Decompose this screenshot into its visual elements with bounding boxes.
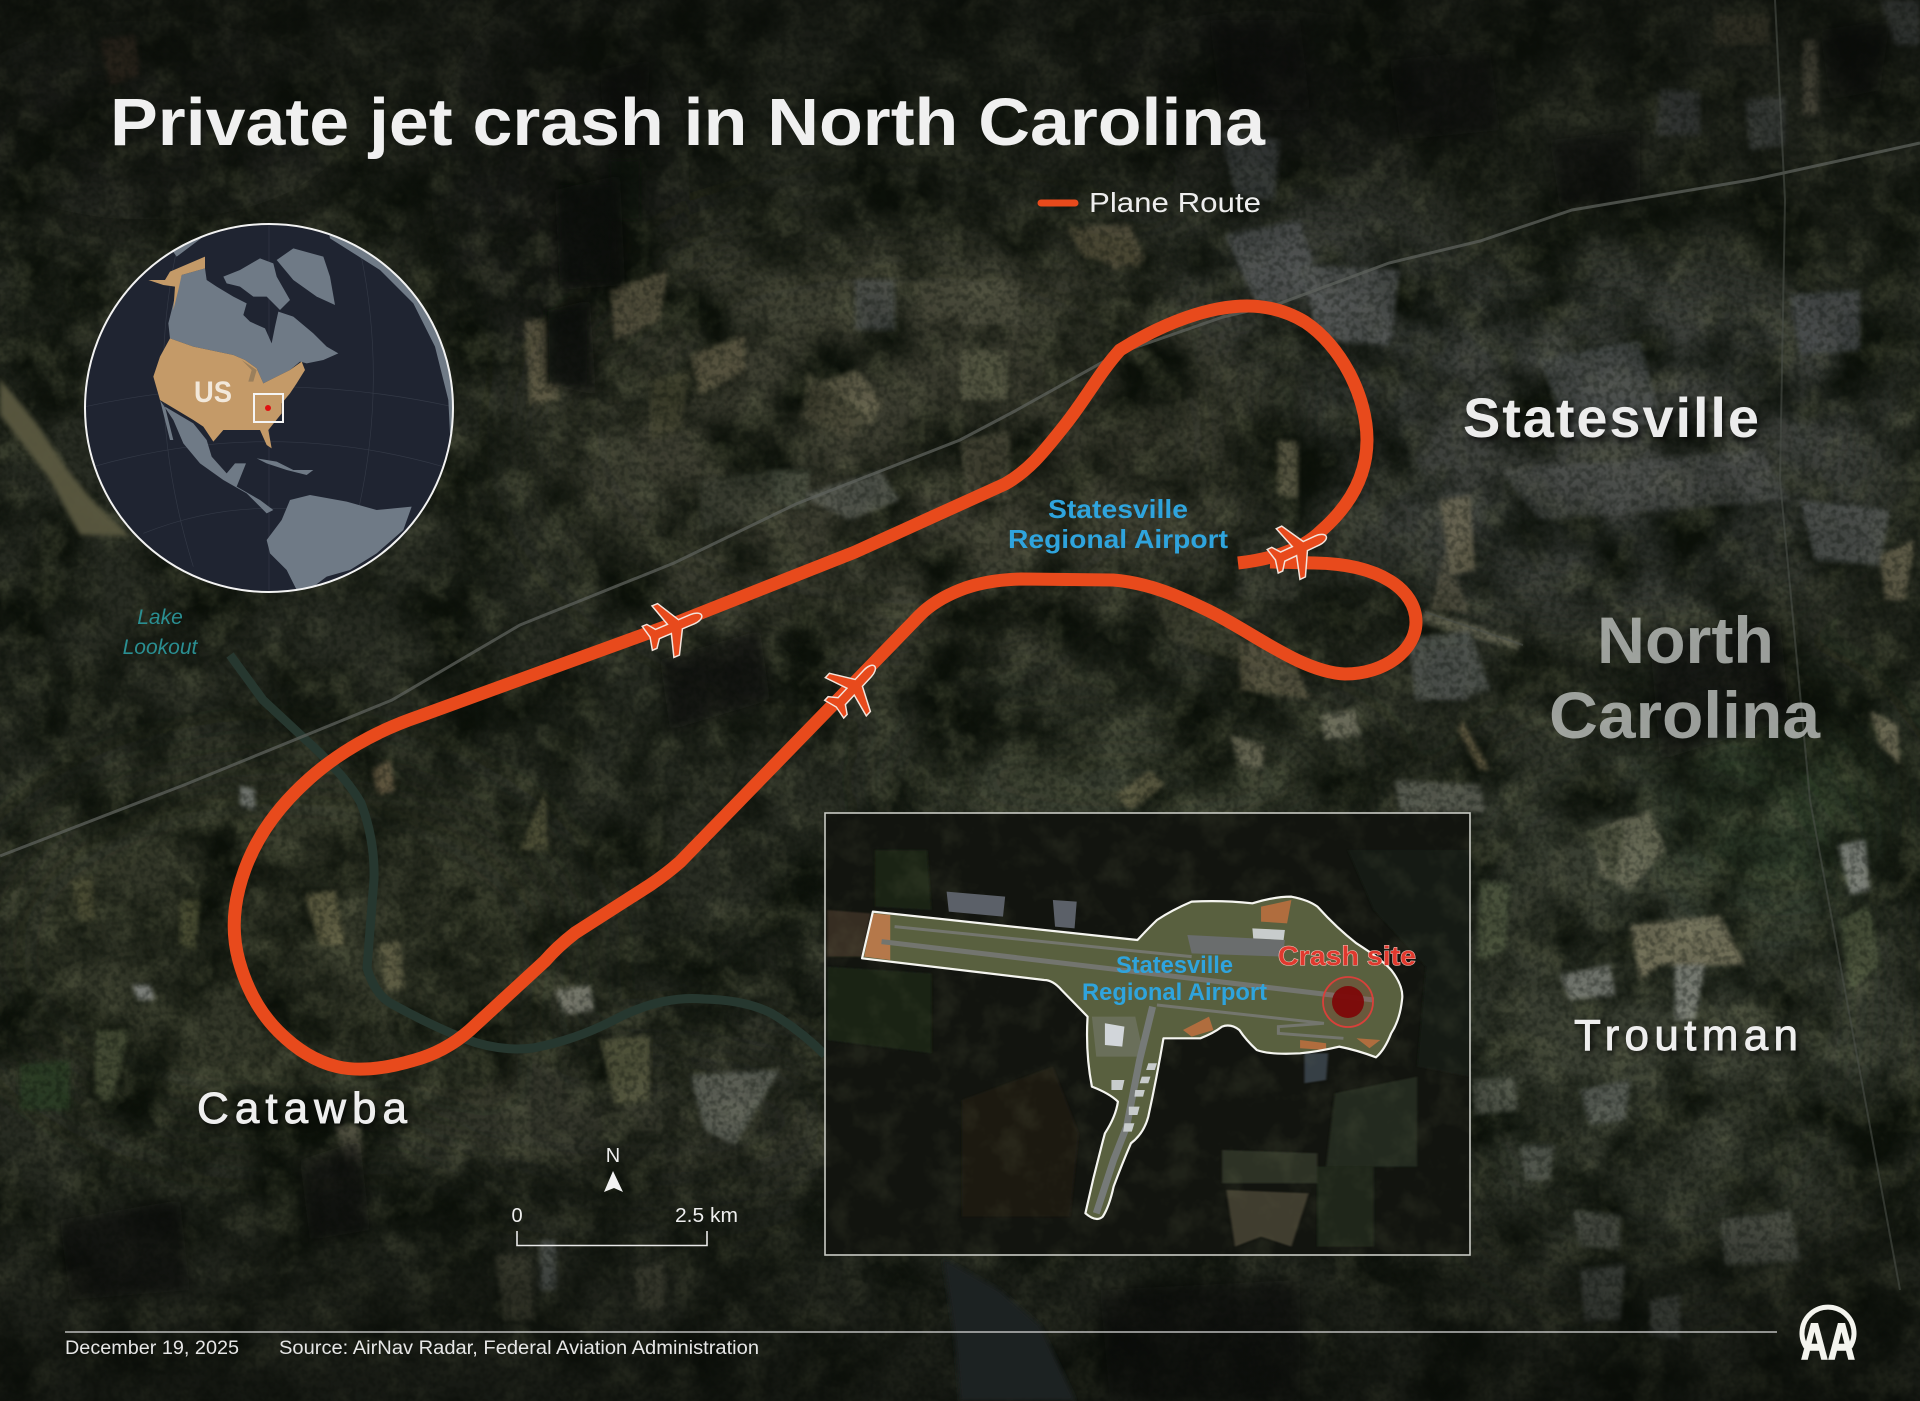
land: Caribbean <box>257 458 313 475</box>
land: Alaska <box>148 257 205 310</box>
land: Greenland <box>277 248 335 305</box>
land: Canada <box>168 268 338 383</box>
map label: North Carolina: North <box>1597 603 1774 677</box>
secondary roads <box>1425 0 1900 1290</box>
footer rule <box>65 1331 1777 1333</box>
Lake Lookout label: Lake <box>137 606 183 629</box>
land: South America <box>267 495 412 597</box>
plane route line <box>234 306 1416 1069</box>
Catawba river <box>230 655 825 1055</box>
graticule lines <box>85 223 453 593</box>
map label: Statesville Regional Airport <box>1008 494 1228 554</box>
globe label: US: US <box>194 376 232 409</box>
inset label: Statesville Regional Airport: Statesville <box>1116 952 1233 979</box>
inset label: Statesville Regional Airport: Regional Airport <box>1082 979 1267 1006</box>
airport outline area <box>862 897 1402 1219</box>
land: Mexico and Central America <box>160 400 273 513</box>
water: lower lake <box>943 1258 1076 1401</box>
plane icon 3 <box>1261 511 1338 587</box>
locator box <box>254 394 283 422</box>
scale bar <box>511 1205 738 1246</box>
airport outline <box>862 897 1402 1219</box>
map label: Statesville: Statesville <box>1463 386 1759 449</box>
water: upper-left lake arm <box>0 379 129 536</box>
Anadolu Agency logo: AA <box>1801 1313 1855 1370</box>
legend: plane route: Plane Route <box>1089 187 1261 218</box>
land: Europe and Africa rim <box>160 220 460 433</box>
inset hangars north of runway <box>947 892 1077 928</box>
land: USA <box>153 338 305 448</box>
land: Arctic islands <box>223 258 290 310</box>
map label: North Carolina <box>1549 603 1821 752</box>
inset label: Crash site: Crash site <box>1278 941 1416 971</box>
panel: airport inset map <box>825 813 1470 1255</box>
Lake Lookout label: Lookout <box>123 636 199 659</box>
crash site marker <box>1323 977 1373 1027</box>
footer source: Source: AirNav Radar, Federal Aviation Administration <box>279 1338 759 1359</box>
map label: Catawba: Catawba <box>197 1084 408 1133</box>
scale bar: 2.5 km <box>675 1205 738 1227</box>
map label: Statesville Regional Airport: Regional Airport <box>1008 524 1228 554</box>
inset label: Statesville Regional Airport <box>1082 952 1267 1006</box>
locator globe <box>85 220 460 597</box>
north arrow: N <box>606 1145 620 1167</box>
water: Great Lakes <box>242 360 257 382</box>
map label: Troutman: Troutman <box>1574 1011 1798 1060</box>
Anadolu Agency logo <box>1801 1307 1855 1370</box>
plane icon 1 <box>636 590 713 664</box>
plane icon 2 <box>814 647 895 728</box>
footer date: December 19, 2025 <box>65 1338 239 1359</box>
inset texture <box>825 813 1470 1255</box>
map label: Statesville Regional Airport: Statesville <box>1048 494 1188 524</box>
map label: North Carolina: Carolina <box>1549 678 1821 752</box>
Lake Lookout label <box>123 606 199 659</box>
apron and runway system <box>1187 935 1285 957</box>
highway <box>0 143 1920 856</box>
inset surrounding fields <box>875 850 931 910</box>
title: Private jet crash in North Carolina <box>110 85 1266 160</box>
location dot <box>265 405 271 411</box>
north arrow <box>604 1145 623 1192</box>
scale bar: 0 <box>511 1205 523 1227</box>
